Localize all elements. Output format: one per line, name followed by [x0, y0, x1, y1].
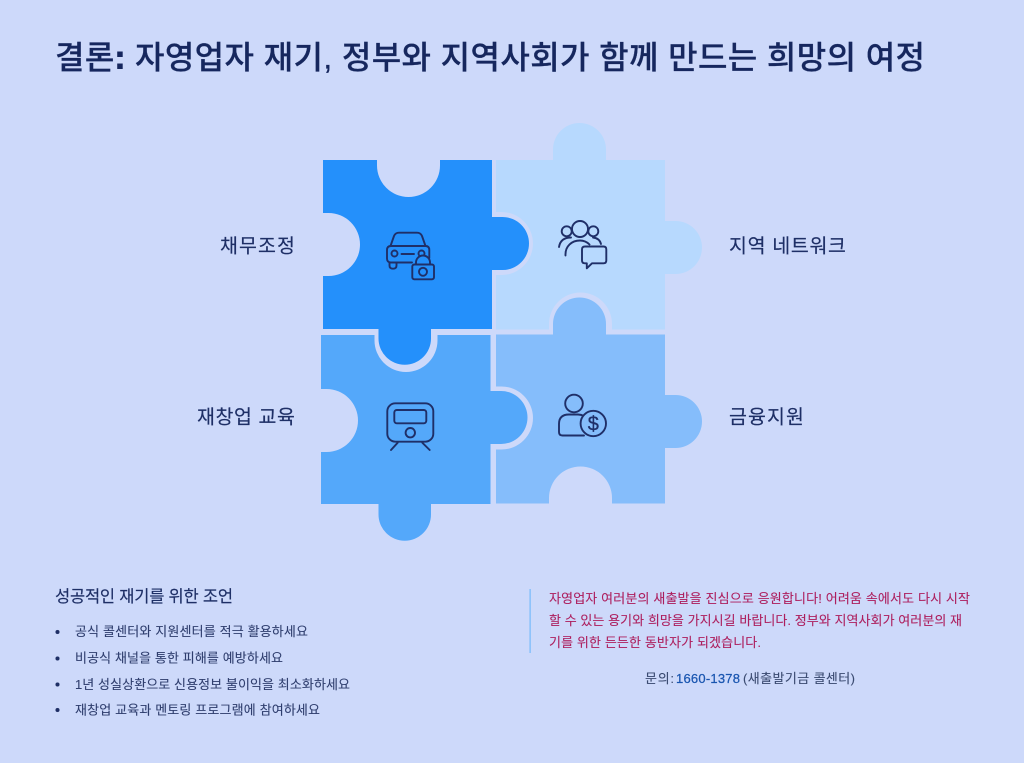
list item 1: 공식 콜센터와 지원센터를 적극 활용하세요	[75, 624, 308, 639]
advice list	[56, 624, 350, 718]
message paragraph: 할 수 있는 용기와 희망을 가지시길 바랍니다. 정부와 지역사회가 여러분의 재	[549, 613, 962, 628]
quote accent bar	[529, 589, 531, 653]
icon: car with lock	[387, 233, 434, 279]
puzzle piece: 지역 네트워크	[496, 123, 702, 330]
puzzle piece: 금융지원	[496, 298, 702, 504]
icon: person with dollar coin: $	[588, 414, 599, 436]
list item 2: 비공식 채널을 통한 피해를 예방하세요	[75, 650, 283, 666]
message paragraph: 기를 위한 든든한 동반자가 되겠습니다.	[549, 635, 761, 650]
icon: train	[387, 403, 433, 450]
icon: person with dollar coin	[559, 395, 606, 436]
label: 재창업 교육: 재창업 교육	[197, 406, 295, 428]
label: 채무조정: 채무조정	[220, 236, 295, 258]
label: 금융지원: 금융지원	[729, 406, 804, 428]
title: 결론: 자영업자 재기, 정부와 지역사회가 함께 만드는 희망의 여정	[55, 40, 925, 76]
contact line	[645, 671, 855, 686]
heading: advice: 성공적인 재기를 위한 조언	[55, 587, 233, 606]
contact line: (새출발기금 콜센터)	[743, 671, 855, 686]
contact line: 문의:	[645, 671, 674, 686]
message paragraph: 자영업자 여러분의 새출발을 진심으로 응원합니다! 어려움 속에서도 다시 시작	[549, 591, 970, 606]
message paragraph	[549, 591, 970, 650]
contact line: 1660-1378	[676, 671, 740, 686]
icon: people with chat bubble	[559, 221, 606, 268]
list item 3: 1년 성실상환으로 신용정보 불이익을 최소화하세요	[75, 677, 350, 692]
puzzle diagram	[321, 123, 702, 541]
label: 지역 네트워크: 지역 네트워크	[729, 236, 846, 258]
list item 4: 재창업 교육과 멘토링 프로그램에 참여하세요	[75, 702, 320, 718]
puzzle piece: 재창업 교육	[321, 335, 528, 541]
puzzle piece: 채무조정	[323, 160, 529, 365]
